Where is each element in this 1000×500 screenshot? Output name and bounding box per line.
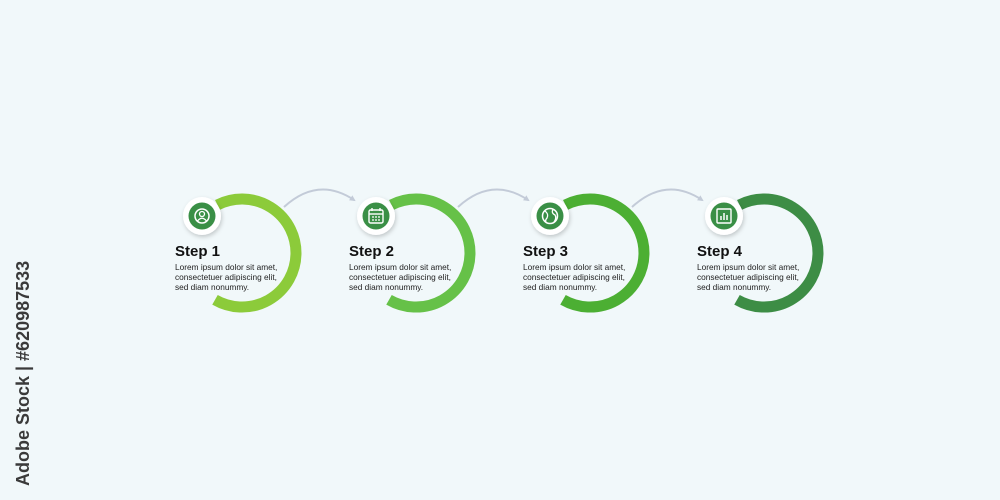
step 1 text: Step 1: [175, 243, 220, 260]
step 2 text: Lorem ipsum dolor sit amet,: [349, 262, 451, 272]
watermark id: Adobe Stock | #620987533: [13, 261, 33, 486]
step 3 text: consectetuer adipiscing elit,: [523, 272, 625, 282]
ring 1: [215, 199, 296, 307]
step 4 text: Lorem ipsum dolor sit amet,: [697, 262, 799, 272]
step 3 text: [523, 243, 625, 292]
step 2 text: Step 2: [349, 243, 394, 260]
step 4 text: sed diam nonummy.: [697, 282, 771, 292]
icon: user: [183, 197, 221, 235]
step 3 text: Step 3: [523, 243, 568, 260]
step 1 text: consectetuer adipiscing elit,: [175, 272, 277, 282]
icon: chart: [705, 197, 743, 235]
ring 3: [563, 199, 644, 307]
arrow 3: [632, 190, 702, 207]
step 1 text: [175, 243, 277, 292]
arrow 1: [284, 190, 354, 207]
step 4 text: consectetuer adipiscing elit,: [697, 272, 799, 282]
ring 4: [737, 199, 818, 307]
step 2 text: [349, 243, 451, 292]
arrow 2: [458, 190, 528, 207]
step 3 text: Lorem ipsum dolor sit amet,: [523, 262, 625, 272]
step 4 text: [697, 243, 799, 292]
icon: globe: [531, 197, 569, 235]
step 2 text: sed diam nonummy.: [349, 282, 423, 292]
step 4 text: Step 4: [697, 243, 742, 260]
step 1 text: Lorem ipsum dolor sit amet,: [175, 262, 277, 272]
icon: calendar: [357, 197, 395, 235]
step 2 text: consectetuer adipiscing elit,: [349, 272, 451, 282]
step 3 text: sed diam nonummy.: [523, 282, 597, 292]
step 1 text: sed diam nonummy.: [175, 282, 249, 292]
ring 2: [389, 199, 470, 307]
